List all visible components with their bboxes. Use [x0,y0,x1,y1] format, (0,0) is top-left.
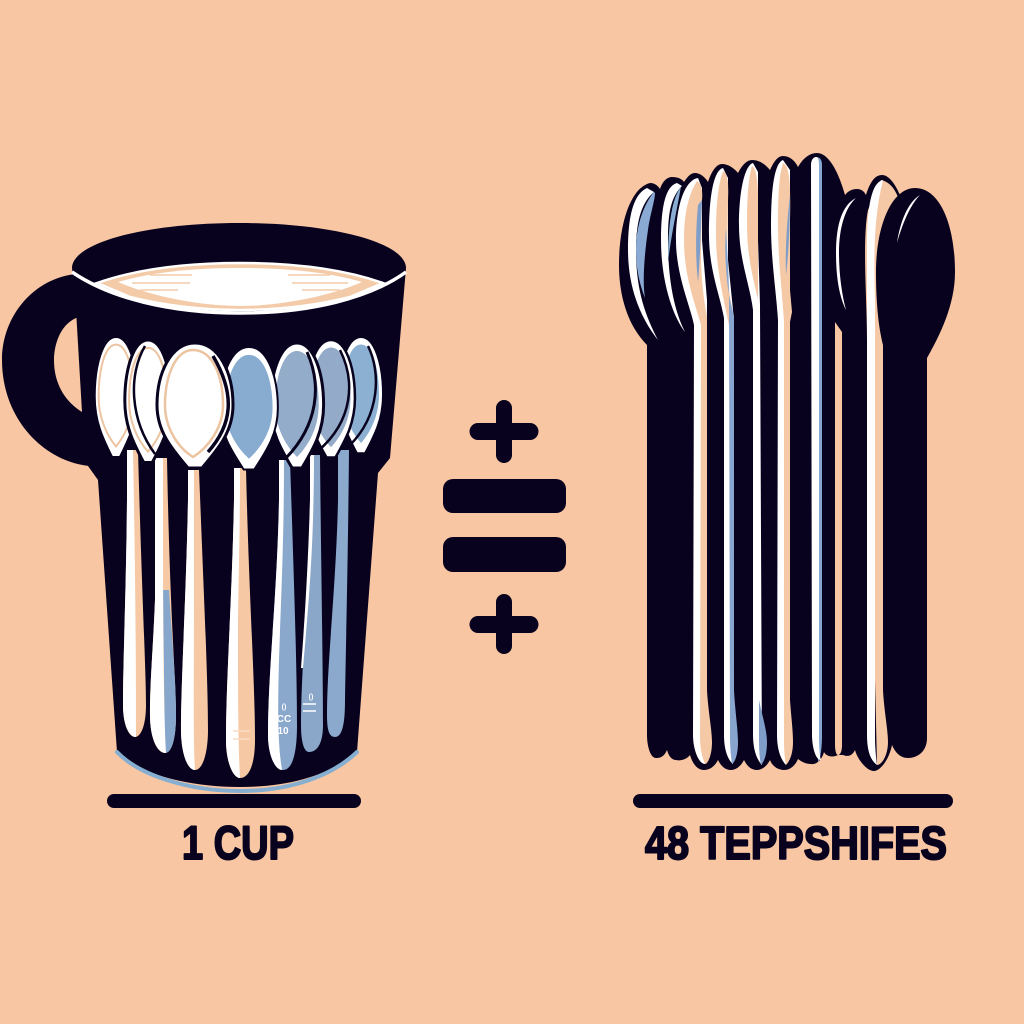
panel: cup of spoons [2,223,406,791]
peach gap [835,322,842,755]
icon: equals sign [443,479,566,572]
baseline under stack [633,794,953,808]
spoon c with handle [676,178,712,764]
head h highlight [836,198,856,310]
spoon e with handle [739,163,767,765]
cup rim highlight [72,272,406,313]
cup base ring [117,752,357,791]
icon: cup body [72,223,406,787]
icon: lower plus [470,594,538,654]
spoon 7 [327,337,383,737]
spoon f with handle [771,160,793,765]
spoon 3 [157,343,233,770]
icon: upper plus [470,400,538,463]
tiny spoon markings: () [309,694,313,701]
head j dark spoon [876,188,955,358]
head 1 [628,188,658,340]
spoon 6 [301,340,355,752]
stack silhouette [619,153,927,771]
tiny spoon lettering [277,704,291,737]
label: 48 teaspoons: 48 TEPPSHIFES [645,817,947,869]
spoon 5 [268,343,324,770]
spoon i with handle [865,180,902,765]
tiny spoon lettering: () [282,704,286,711]
spoon 2 [125,340,176,753]
cup liquid [97,263,383,310]
spoon 4 [220,347,278,778]
icon: cup handle [2,274,110,480]
spoon d with handle [709,168,738,764]
tiny spoon lettering: CC [277,714,291,725]
panel: stack of teaspoons [619,153,955,771]
spoon g with handle [811,157,822,762]
head 2 [661,183,685,332]
tiny spoon lettering: 10 [277,726,289,737]
tiny spoon mark [233,731,250,739]
spoon 1 [95,337,146,737]
label: 1 cup: 1 CUP [182,816,294,869]
baseline under cup [107,794,361,808]
